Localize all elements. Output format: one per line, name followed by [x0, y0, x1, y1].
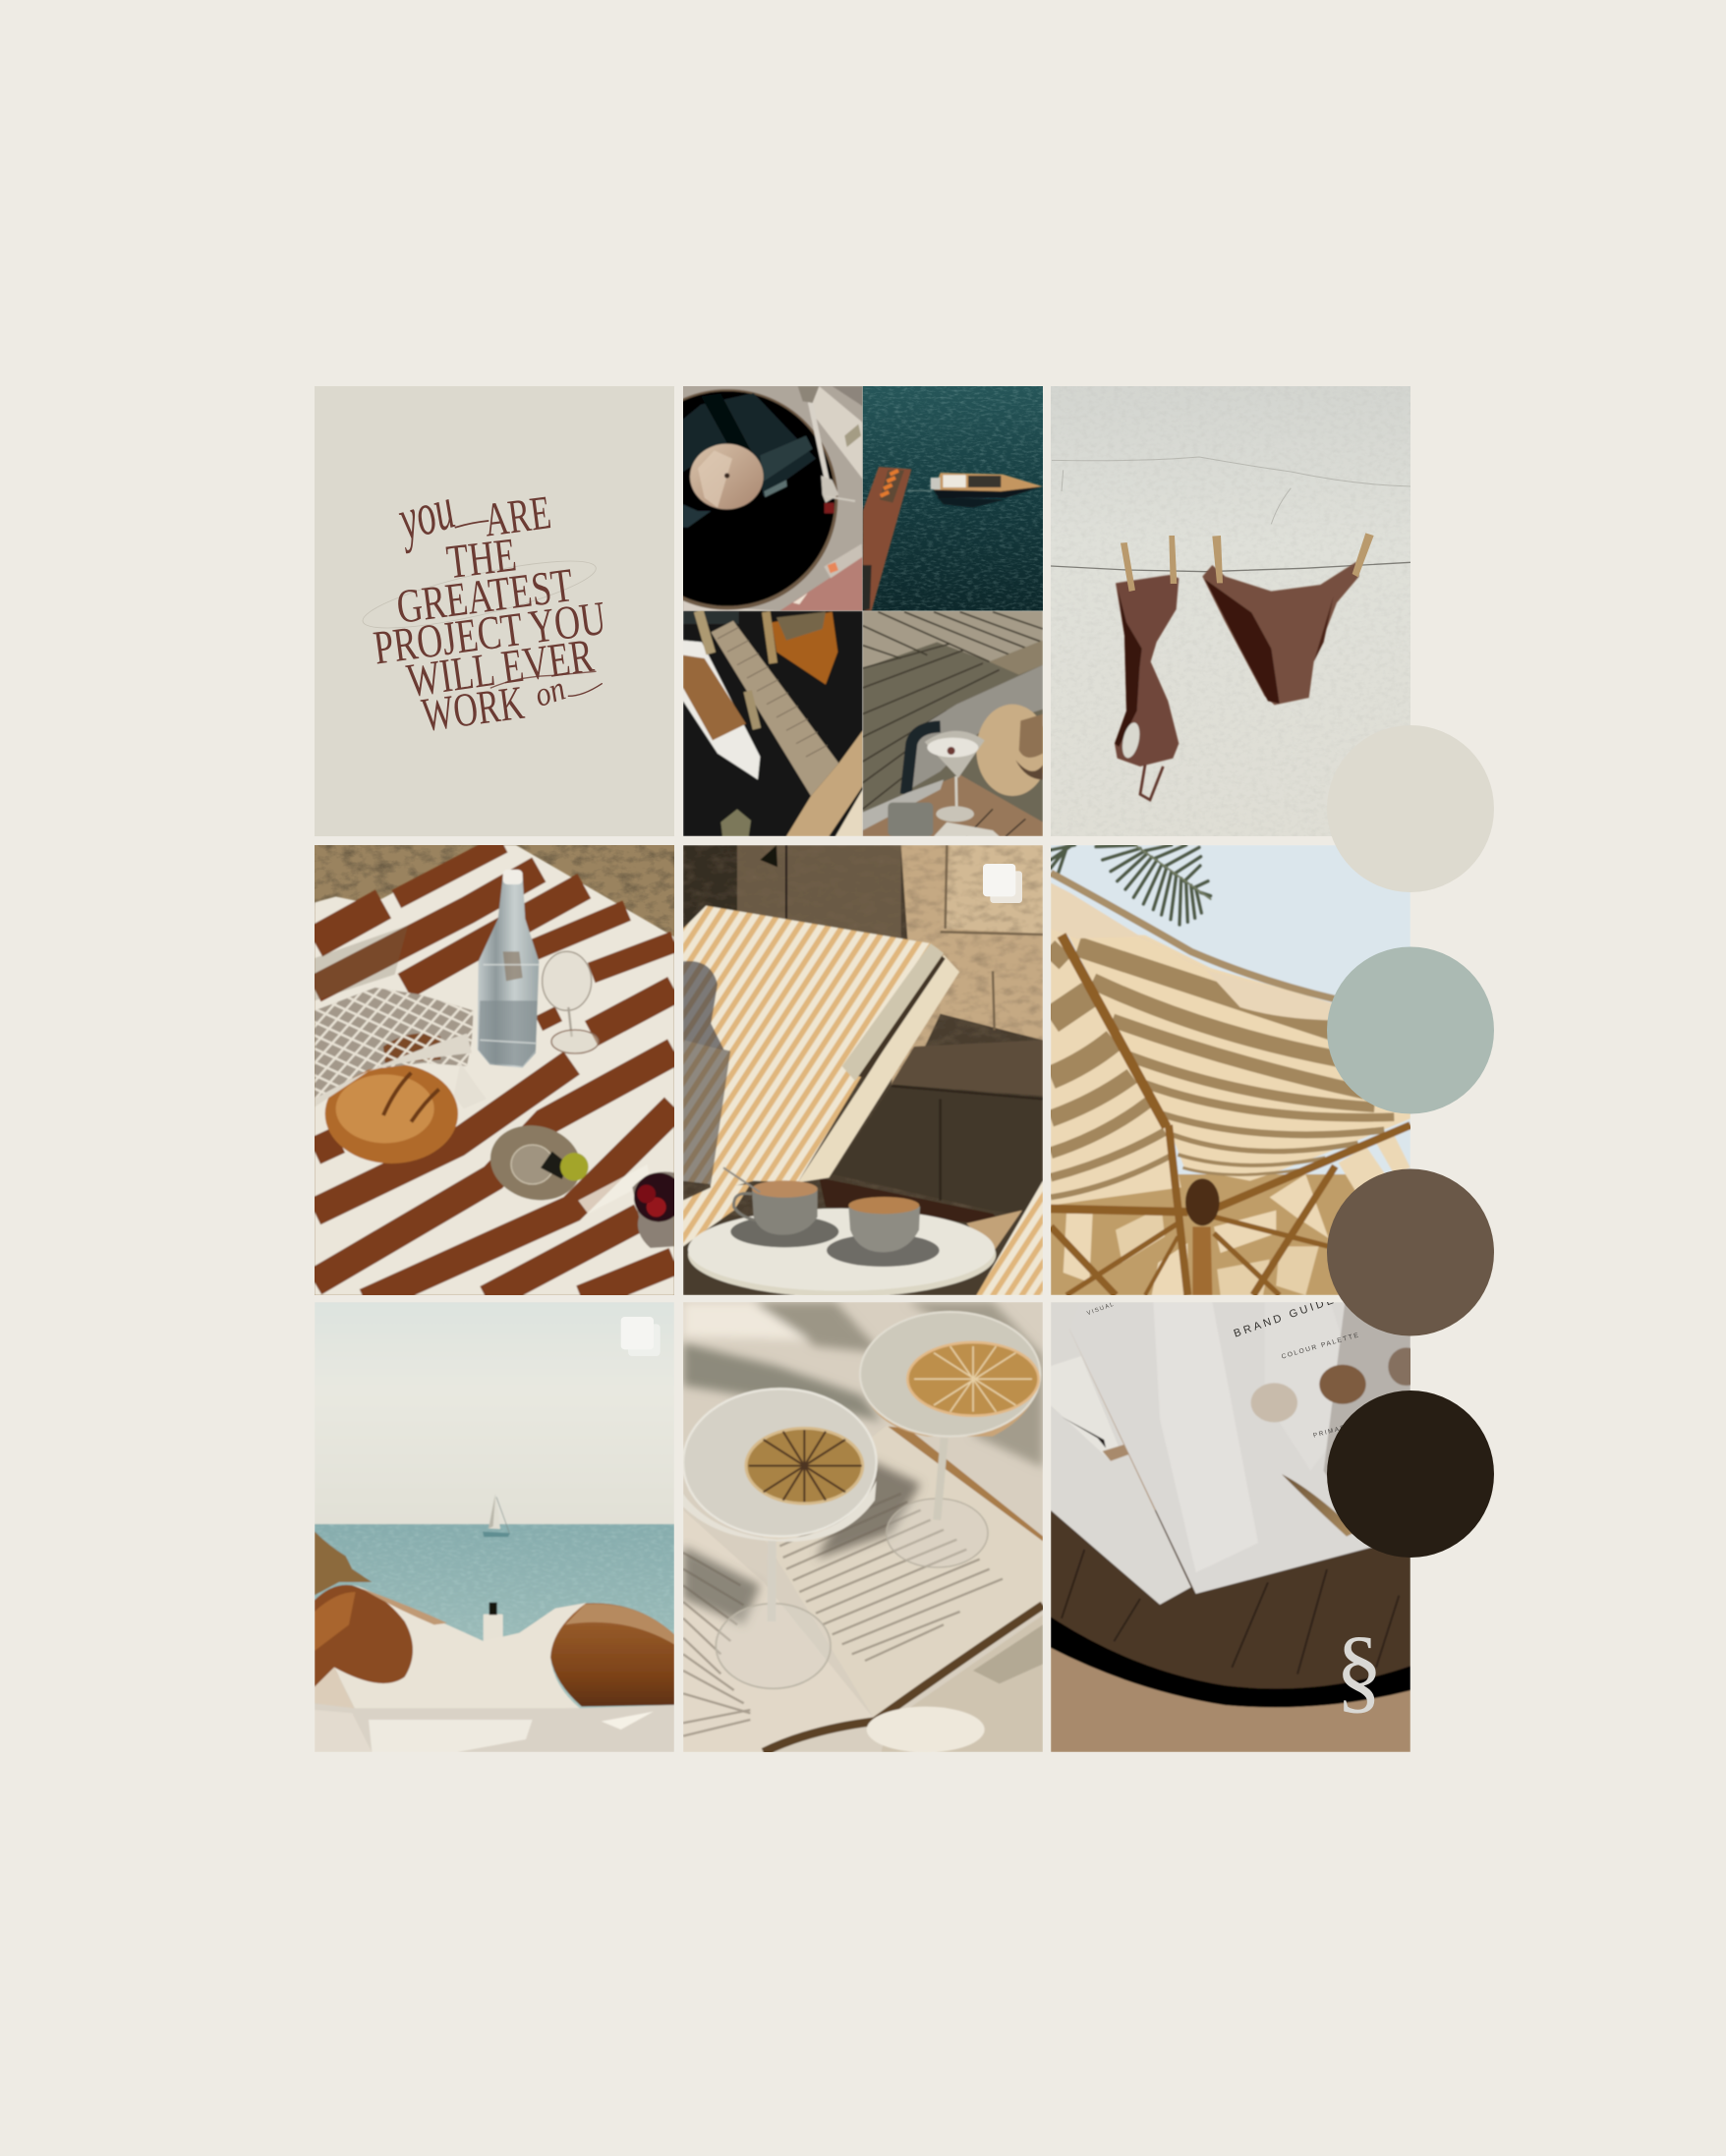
panel: four photo grid: [683, 386, 1043, 836]
script word: on: on: [530, 669, 570, 714]
bikini bottom: [1202, 562, 1359, 705]
palm fronds: [1051, 845, 1211, 925]
plaster wall: [1051, 386, 1410, 836]
sky: [1051, 845, 1410, 1295]
right lounger edge: [976, 1181, 1043, 1295]
quote text: ARE: [481, 485, 554, 547]
linen background: [683, 1302, 1043, 1752]
back paper caption: VISUAL: [1086, 1302, 1116, 1317]
bread: [325, 1064, 458, 1163]
left coupe glass: [683, 1389, 877, 1688]
front paper: [1069, 1302, 1410, 1594]
lounger seat: [710, 1047, 862, 1192]
towel stripes: [315, 843, 674, 1302]
shoulder skin: [315, 1585, 415, 1687]
left canopy pane: [1051, 906, 1181, 1206]
sailboat: [483, 1494, 510, 1537]
bikini top: [1115, 575, 1179, 800]
script swashes and underline: [455, 521, 602, 696]
palette swatch: mocha: [1327, 1169, 1494, 1336]
cherries in cup: [632, 1171, 674, 1248]
photo: deck with martini and straw hat: [863, 611, 1043, 836]
table and fabric: [1051, 1302, 1410, 1752]
green apple: [560, 1153, 589, 1181]
perfume bottle: [484, 1603, 503, 1642]
coffee cup left: [730, 1216, 838, 1247]
photo: boat on green water: [863, 386, 1043, 611]
palette swatch: sage: [1327, 947, 1494, 1114]
lamp: [760, 845, 777, 867]
sky: [315, 1302, 674, 1525]
person shadow: [683, 961, 724, 1050]
stone wall: [683, 845, 1043, 1295]
section sign logo: §: [1336, 1617, 1383, 1722]
palette swatch: espresso: [1327, 1390, 1494, 1558]
under-arm strap and towel fold: [315, 1668, 356, 1710]
right coupe glass: [860, 1312, 1040, 1567]
book pages: [683, 1510, 875, 1752]
hair: [315, 1531, 372, 1595]
panel: striped parasol under palm: [1051, 845, 1410, 1295]
panel: brand guidelines flat lay: [1051, 1278, 1410, 1752]
canopy flap and rim: [1051, 882, 1335, 1020]
parasol frame: [1051, 936, 1410, 1295]
panel: woman on beach with sailboat: [315, 1302, 674, 1752]
net bag: [315, 988, 474, 1099]
main canopy pane: [1066, 932, 1410, 1181]
book spine and lower page: [764, 1605, 1043, 1752]
brochure subtitle: COLOUR PALETTE: [1281, 1332, 1360, 1361]
lounger side band: [798, 955, 959, 1182]
coffee cup right: [827, 1234, 940, 1267]
lower canopy base: [1051, 1174, 1410, 1295]
photo: wooden boats at dock: [683, 611, 863, 836]
headrest cushion: [683, 906, 944, 1081]
swatches on paper: [1251, 1383, 1297, 1422]
panel: striped lounger and coffee: [683, 845, 1043, 1295]
thigh skin: [550, 1603, 674, 1707]
water bottle: [478, 877, 539, 1068]
waffle towel: [315, 1703, 674, 1752]
silver plate: [482, 1115, 590, 1210]
icon: carousel squares: [621, 1317, 661, 1356]
clothesline: [1051, 562, 1410, 572]
photo: turntable: [683, 386, 863, 611]
sand: [315, 845, 674, 1295]
quote text: GREATEST: [393, 558, 576, 634]
pen: [1282, 1474, 1356, 1537]
shadow streak: [315, 926, 408, 1000]
white swimsuit: [334, 1585, 587, 1710]
palette swatch: sand: [1327, 725, 1494, 892]
brochure swatch caption: PRIMARY: [1312, 1422, 1352, 1440]
lower canopy stripes: [1339, 1147, 1388, 1201]
quote text: THE: [444, 528, 519, 589]
script word: you: you: [387, 475, 461, 554]
panel: picnic on striped towel: [315, 845, 674, 1295]
panel: swimwear on clothesline: [1051, 386, 1410, 836]
sea: [315, 1524, 674, 1721]
quote text: WILL EVER: [404, 629, 597, 708]
decorative ellipse behind quote: [358, 547, 601, 642]
clothespegs: [1121, 533, 1374, 592]
back paper: [1051, 1302, 1191, 1605]
quote text: [371, 485, 608, 742]
wine glass: [543, 951, 592, 1010]
brochure title: BRAND GUIDELINES: [1233, 1278, 1381, 1340]
round table: [688, 1212, 996, 1297]
towel: [315, 845, 674, 1295]
panel: cocktails on open book: [683, 1302, 1043, 1752]
printed lines: [683, 1494, 1003, 1736]
panel: quote card: [315, 386, 674, 836]
icon: carousel squares: [983, 864, 1022, 903]
quote text: WORK: [419, 676, 527, 742]
